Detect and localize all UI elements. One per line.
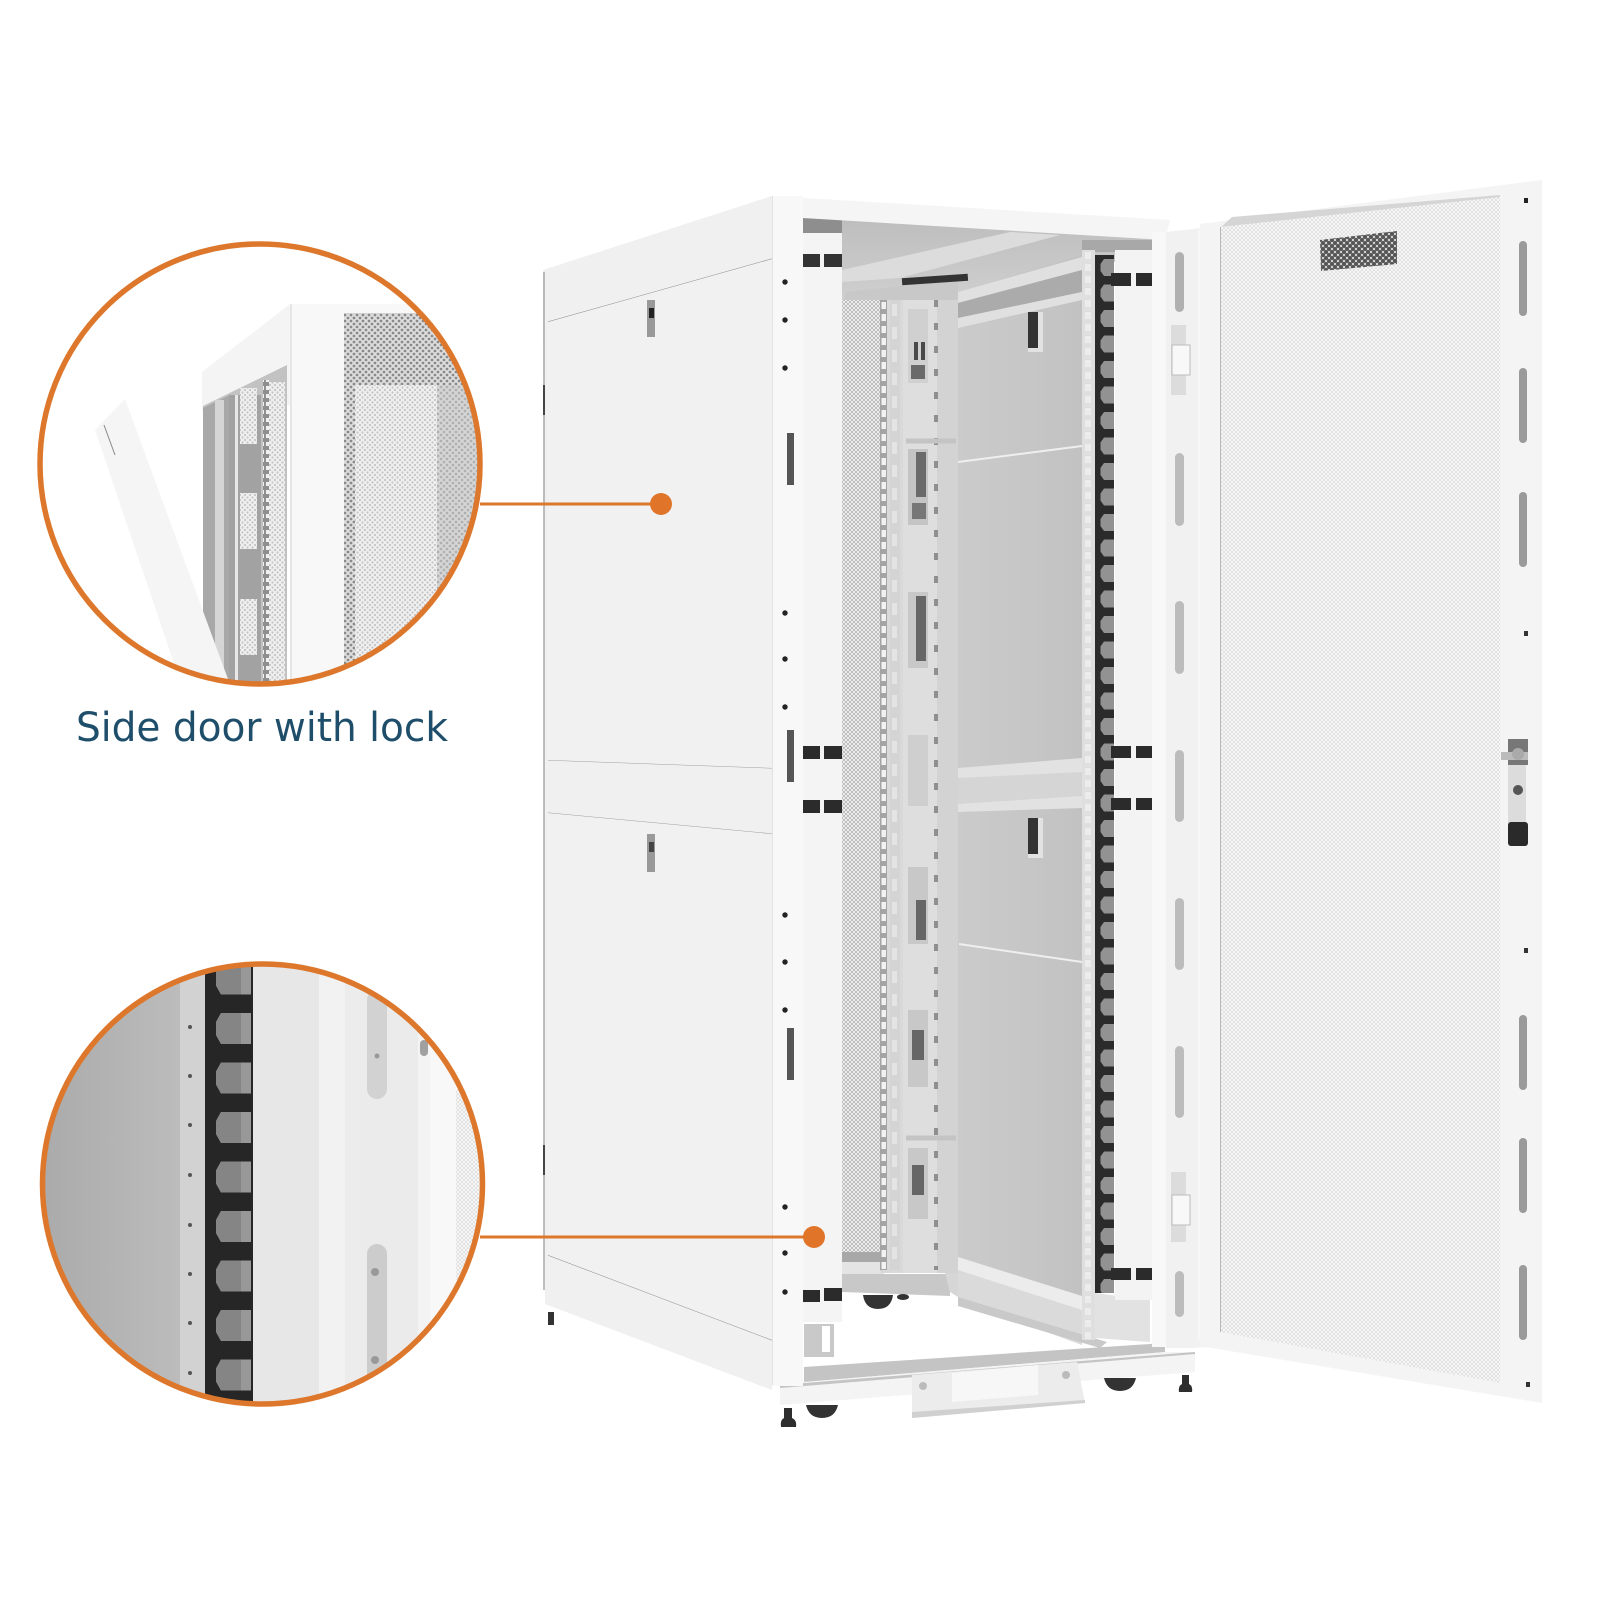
hinge strip xyxy=(1166,226,1220,1348)
inset circle: side door with lock xyxy=(40,244,487,695)
right black cable manager xyxy=(1095,255,1114,1293)
door right-edge slots xyxy=(1519,241,1527,1340)
inset ring xyxy=(42,964,482,1404)
side panel xyxy=(543,196,772,1390)
back foot xyxy=(548,1312,554,1325)
right rack rail xyxy=(1082,250,1095,1340)
caption: side door with lock: Side door with lock xyxy=(76,705,449,751)
cabinet illustration xyxy=(543,180,1542,1427)
left cable cover xyxy=(803,233,842,1357)
door perforated panel xyxy=(1220,197,1500,1383)
connector line: cable manager xyxy=(480,1236,814,1238)
callout dot: cable manager xyxy=(803,1226,825,1248)
open door xyxy=(1200,180,1542,1403)
inset circle: cable manager xyxy=(40,960,486,1414)
bottom left rails xyxy=(842,1252,958,1309)
base frame xyxy=(780,1343,1195,1427)
connector line: side door xyxy=(480,502,661,506)
left rack rail xyxy=(845,274,968,1273)
interior back wall xyxy=(803,216,1165,1348)
front frame xyxy=(772,196,1170,1386)
callout dot: side door xyxy=(650,493,672,515)
inset ring xyxy=(40,244,480,684)
door lock xyxy=(1501,739,1528,846)
door vent xyxy=(1320,231,1397,271)
bottom right interior xyxy=(1095,1293,1150,1342)
left side perforated panel xyxy=(842,300,880,1252)
right cable cover xyxy=(1111,250,1152,1300)
